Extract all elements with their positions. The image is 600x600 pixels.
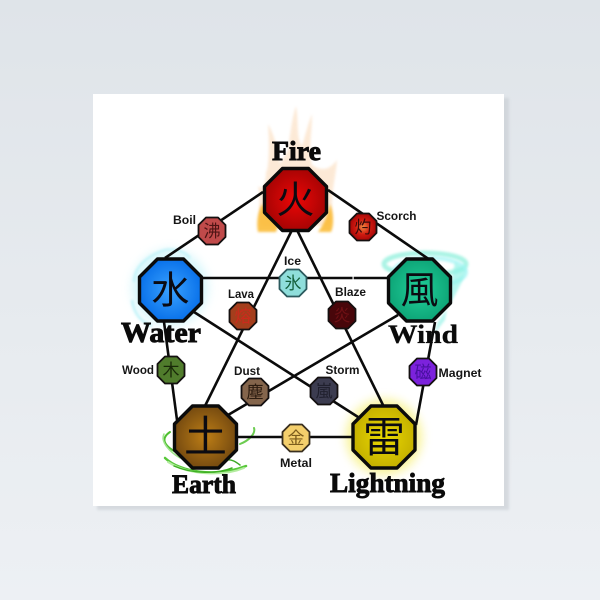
label: Lava: Lava xyxy=(228,287,254,301)
label: Magnet: Magnet xyxy=(438,366,482,380)
node: Water: 水 xyxy=(151,260,190,314)
pentagram connecting lines xyxy=(164,190,435,437)
node: Wood: 木 xyxy=(162,356,180,381)
label: Ice: Ice xyxy=(284,254,301,268)
node: Magnet xyxy=(410,358,436,386)
node: Storm xyxy=(310,377,338,404)
node: Earth: 土 xyxy=(184,403,227,465)
node: Storm: 嵐 xyxy=(316,377,332,402)
node: Water xyxy=(140,259,202,321)
label: Scorch: Scorch xyxy=(376,209,416,223)
node: Magnet: 磁 xyxy=(414,358,432,383)
node: Wood xyxy=(158,356,184,384)
node: Scorch xyxy=(350,213,376,240)
node: Wind xyxy=(388,259,450,321)
node: Metal: 金 xyxy=(288,424,304,449)
title: Wind: Wind xyxy=(388,320,459,349)
node: Dust xyxy=(242,378,268,406)
effect: water aura xyxy=(132,249,208,326)
effect: earth green swirl xyxy=(163,428,254,473)
node: Earth xyxy=(174,403,236,468)
node: Lava xyxy=(230,302,256,330)
node: Wind: 風 xyxy=(400,260,439,314)
poster shadow xyxy=(97,98,509,510)
node: Fire: 火 xyxy=(276,169,315,224)
node: Blaze xyxy=(328,301,356,328)
node: Ice: 氷 xyxy=(284,269,302,294)
node: Boil xyxy=(198,217,226,244)
label: Dust: Dust xyxy=(234,364,260,378)
node: Dust: 塵 xyxy=(246,378,264,403)
label: Storm: Storm xyxy=(326,363,360,377)
label: Wood: Wood xyxy=(122,363,154,377)
node: Boil: 沸 xyxy=(204,217,220,242)
node: Lightning xyxy=(353,404,415,468)
poster sheet xyxy=(93,94,504,506)
effect: wind swirl xyxy=(384,253,466,334)
effect: fire flames xyxy=(257,106,337,232)
effect: lightning glow xyxy=(346,399,422,475)
title: Lightning: Lightning xyxy=(330,468,445,498)
node: Metal xyxy=(282,424,310,452)
label: Metal: Metal xyxy=(280,456,312,470)
label: Blaze: Blaze xyxy=(335,285,366,299)
node: Fire xyxy=(264,168,326,230)
node: Blaze: 炎 xyxy=(334,301,350,326)
title: Fire: Fire xyxy=(272,136,321,166)
node: Lava: 熔 xyxy=(234,302,252,327)
node: Scorch: 灼 xyxy=(354,213,372,238)
title: Earth: Earth xyxy=(172,470,237,499)
title: Water: Water xyxy=(121,318,201,349)
node: Lightning: 雷 xyxy=(363,404,405,465)
label: Boil: Boil xyxy=(173,213,196,227)
node: Ice xyxy=(280,269,306,296)
